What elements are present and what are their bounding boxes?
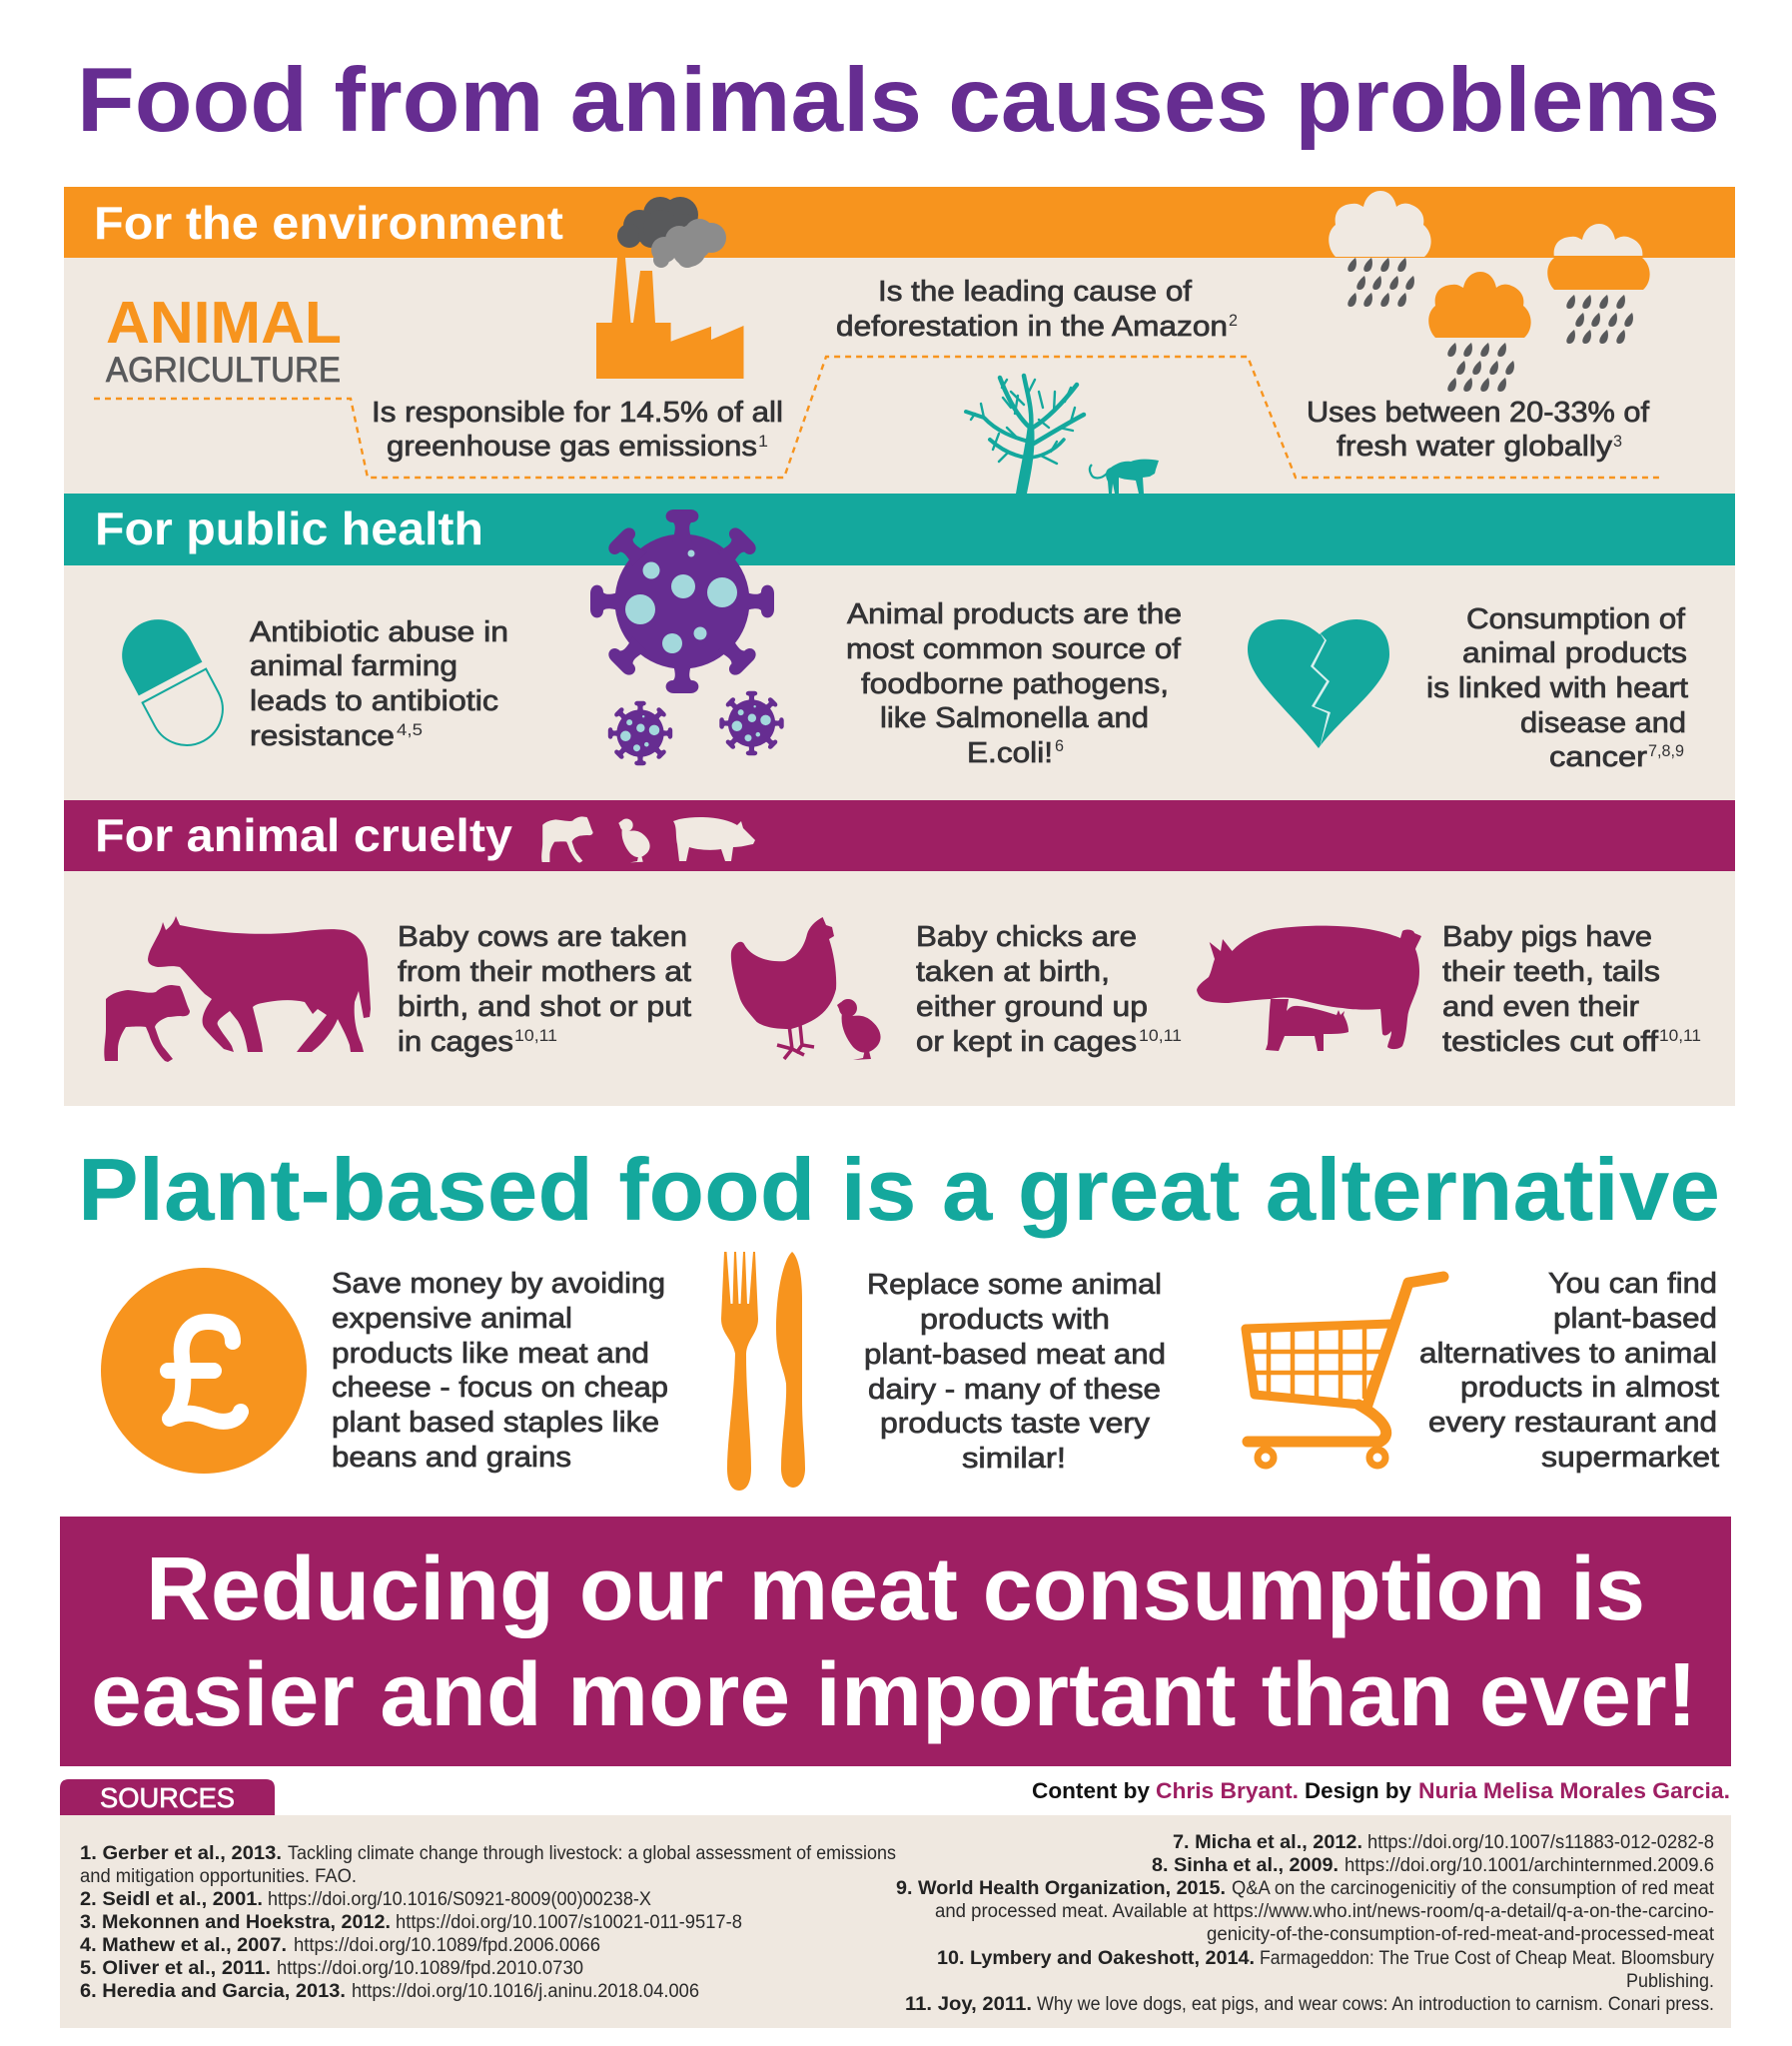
- sources list: right column: Why we love dogs, eat pigs, and wear cows: An introduction to carnism. Conari press.: [1037, 1994, 1714, 2015]
- sources list: left column: and mitigation opportunities. FAO.: [80, 1866, 357, 1887]
- text: heart disease and cancer: is linked with heart: [1426, 672, 1688, 704]
- text: heart disease and cancer: [1426, 603, 1688, 773]
- sources list: right column: [896, 1832, 1715, 2015]
- text: find alternatives: products in almost: [1460, 1372, 1719, 1404]
- text: save money: cheese - focus on cheap: [332, 1372, 668, 1404]
- text: baby chicks: 10,11: [1139, 1026, 1182, 1045]
- text: find alternatives: every restaurant and: [1428, 1407, 1717, 1439]
- text: replace animal products: dairy - many of these: [868, 1374, 1161, 1406]
- text: baby pigs: Baby pigs have: [1442, 921, 1652, 953]
- text: replace animal products: plant-based meat and: [864, 1339, 1166, 1371]
- text: baby cows: Baby cows are taken: [398, 921, 687, 953]
- text: baby chicks: either ground up: [916, 991, 1148, 1023]
- text: baby chicks: or kept in cages: [916, 1026, 1137, 1058]
- text: replace animal products: Replace some animal: [867, 1269, 1162, 1301]
- heading bar: for animal cruelty: For animal cruelty: [95, 809, 512, 861]
- icon: broken heart: [1248, 619, 1389, 748]
- text: foodborne pathogens: foodborne pathogens,: [861, 668, 1169, 700]
- icon: header pig: [673, 817, 755, 861]
- icon: large virus: [590, 510, 774, 693]
- text: deforestation: [836, 276, 1238, 343]
- callout banner: easier and more important than ever!: [91, 1645, 1697, 1745]
- text: find alternatives: supermarket: [1541, 1442, 1719, 1474]
- sources list: right column: and processed meat. Available at https://www.who.int/news-room/q-a-detail/q-a-on-the-carcino-: [935, 1901, 1714, 1922]
- text: greenhouse gas emissions: [372, 397, 783, 463]
- icon: hen and chick: [731, 917, 881, 1060]
- sources list: right column: Farmageddon: The True Cost of Cheap Meat. Bloomsbury: [1260, 1948, 1714, 1969]
- text: heart disease and cancer: disease and: [1520, 707, 1686, 739]
- text: deforestation: 2: [1229, 311, 1238, 330]
- icon: big cat: [1090, 460, 1159, 494]
- text: fresh water: fresh water globally: [1337, 431, 1613, 463]
- text: baby pigs: 10,11: [1659, 1026, 1701, 1045]
- text: save money: expensive animal: [332, 1303, 572, 1335]
- text: greenhouse gas emissions: greenhouse gas emissions: [387, 431, 757, 463]
- text: heart disease and cancer: Consumption of: [1466, 603, 1685, 635]
- text: antibiotic resistance: 4,5: [397, 720, 423, 739]
- sources list: left column: 3. Mekonnen and Hoekstra, 2012.: [80, 1912, 391, 1933]
- text: antibiotic resistance: Antibiotic abuse in: [250, 616, 508, 648]
- sources list: left column: 2. Seidl et al., 2001.: [80, 1889, 263, 1910]
- sources list: left column: 4. Mathew et al., 2007.: [80, 1935, 287, 1956]
- icon: rain clouds: [1329, 191, 1650, 392]
- text: save money: products like meat and: [332, 1338, 649, 1370]
- icon: header calf: [541, 816, 593, 863]
- credits: Design by: [1305, 1778, 1412, 1803]
- text: baby pigs: their teeth, tails: [1442, 956, 1660, 988]
- sources list: right column: https://doi.org/10.1007/s11883-012-0282-8: [1367, 1832, 1714, 1853]
- text: find alternatives: plant-based: [1553, 1303, 1717, 1335]
- text: baby chicks: [916, 921, 1182, 1058]
- text: heart disease and cancer: cancer: [1549, 741, 1648, 773]
- heading bar: for public health: [64, 494, 1735, 565]
- text: baby cows: from their mothers at: [398, 956, 691, 988]
- text: replace animal products: products with: [920, 1304, 1110, 1336]
- sources list: left column: https://doi.org/10.1089/fpd.2010.0730: [277, 1958, 583, 1979]
- text: baby pigs: [1442, 921, 1701, 1058]
- text: antibiotic resistance: animal farming: [250, 650, 457, 682]
- text: baby pigs: and even their: [1442, 991, 1640, 1023]
- dashed connector line: [94, 357, 1662, 478]
- text: baby cows: in cages: [398, 1026, 513, 1058]
- text: fresh water: Uses between 20-33% of: [1307, 397, 1649, 429]
- text: save money: Save money by avoiding: [332, 1268, 665, 1300]
- sources list: left column: [80, 1843, 896, 2002]
- text: replace animal products: [864, 1269, 1166, 1475]
- sources list: right column: 7. Micha et al., 2012.: [1173, 1832, 1362, 1853]
- text: save money: beans and grains: [332, 1442, 571, 1474]
- sources list: right column: Q&A on the carcinogenicitiy of the consumption of red meat: [1232, 1878, 1715, 1899]
- text: find alternatives: [1419, 1268, 1719, 1474]
- credits: [1032, 1778, 1730, 1803]
- text: fresh water: [1307, 397, 1649, 463]
- panel: for the environment: [64, 187, 1735, 494]
- text: greenhouse gas emissions: 1: [758, 432, 768, 451]
- text: foodborne pathogens: E.coli!: [967, 737, 1053, 769]
- text: baby cows: 10,11: [514, 1026, 557, 1045]
- icon: pig and piglet: [1197, 926, 1421, 1051]
- text: foodborne pathogens: Animal products are the: [847, 598, 1182, 630]
- sources list: left column: Tackling climate change through livestock: a global assessment of emissions: [288, 1843, 896, 1864]
- text: antibiotic resistance: resistance: [250, 720, 395, 752]
- icon: bare tree: [966, 376, 1084, 494]
- sources list: left column: 6. Heredia and Garcia, 2013.: [80, 1981, 346, 2002]
- sources list: right column: genicity-of-the-consumption-of-red-meat-and-processed-meat: [1207, 1924, 1715, 1945]
- icon: cow and calf: [104, 916, 371, 1062]
- text: foodborne pathogens: [846, 598, 1182, 769]
- panel: for animal cruelty: [64, 800, 1735, 1106]
- heading bar: for the environment: [64, 187, 1735, 258]
- text: antibiotic resistance: leads to antibiotic: [250, 685, 498, 717]
- callout banner: Reducing our meat consumption is: [146, 1539, 1645, 1639]
- icon: factory with smoke: [596, 197, 743, 379]
- credits: Content by: [1032, 1778, 1151, 1803]
- sources tab: SOURCES: [100, 1782, 235, 1813]
- sources tab: [60, 1779, 275, 1815]
- text: heart disease and cancer: 7,8,9: [1648, 741, 1684, 760]
- text: baby chicks: Baby chicks are: [916, 921, 1137, 953]
- icon: fork and knife: [721, 1252, 805, 1491]
- icon: header chick: [618, 818, 650, 862]
- heading: animal agriculture: ANIMAL: [106, 290, 342, 356]
- text: deforestation: deforestation in the Amazon: [836, 311, 1228, 343]
- text: baby cows: birth, and shot or put: [398, 991, 691, 1023]
- sources list: right column: 10. Lymbery and Oakeshott, 2014.: [937, 1948, 1255, 1969]
- sources list: right column: 9. World Health Organization, 2015.: [896, 1878, 1226, 1899]
- sources list: right column: Publishing.: [1626, 1971, 1714, 1992]
- sources list: right column: 8. Sinha et al., 2009.: [1152, 1855, 1339, 1876]
- text: baby cows: [398, 921, 691, 1058]
- icon: small virus left: [608, 701, 672, 765]
- icon: shopping cart: [1246, 1277, 1443, 1466]
- panel: for public health: [64, 494, 1735, 800]
- text: antibiotic resistance: [250, 616, 508, 752]
- icon: antibiotic capsule: [109, 606, 236, 758]
- sources list: left column: https://doi.org/10.1007/s10021-011-9517-8: [396, 1912, 742, 1933]
- heading bar: for public health: For public health: [95, 503, 483, 554]
- text: heart disease and cancer: animal products: [1462, 637, 1687, 669]
- title: Food from animals causes problems: [77, 50, 1720, 151]
- heading: animal agriculture: [106, 290, 342, 390]
- text: foodborne pathogens: 6: [1055, 736, 1064, 755]
- text: save money: [332, 1268, 668, 1474]
- icon: pound coin: [101, 1268, 307, 1474]
- text: find alternatives: You can find: [1548, 1268, 1717, 1300]
- sources list: right column: https://doi.org/10.1001/archinternmed.2009.6: [1344, 1855, 1714, 1876]
- text: replace animal products: products taste very: [880, 1408, 1151, 1440]
- text: save money: plant based staples like: [332, 1407, 659, 1439]
- callout banner: [60, 1517, 1731, 1766]
- sources list: left column: https://doi.org/10.1016/j.aninu.2018.04.006: [352, 1981, 699, 2002]
- sources list: right column: 11. Joy, 2011.: [905, 1994, 1032, 2015]
- sources list: left column: https://doi.org/10.1016/S0921-8009(00)00238-X: [268, 1889, 651, 1910]
- text: fresh water: 3: [1613, 432, 1622, 451]
- text: replace animal products: similar!: [962, 1443, 1066, 1475]
- text: foodborne pathogens: like Salmonella and: [880, 702, 1149, 734]
- text: deforestation: Is the leading cause of: [878, 276, 1192, 308]
- heading: animal agriculture: AGRICULTURE: [106, 351, 341, 390]
- heading bar: for the environment: For the environment: [94, 197, 563, 249]
- panel: sources: [60, 1779, 1731, 2028]
- icon: small virus right: [719, 691, 784, 755]
- text: baby pigs: testicles cut off: [1442, 1026, 1658, 1058]
- text: foodborne pathogens: most common source of: [846, 633, 1181, 665]
- credits: Chris Bryant.: [1156, 1778, 1299, 1803]
- sources list: left column: 1. Gerber et al., 2013.: [80, 1843, 282, 1864]
- text: find alternatives: alternatives to animal: [1419, 1338, 1717, 1370]
- heading bar: for animal cruelty: [64, 800, 1735, 871]
- heading: plant-based alternative: Plant-based food is a great alternative: [78, 1140, 1720, 1239]
- text: greenhouse gas emissions: Is responsible for 14.5% of all: [372, 397, 783, 429]
- sources list: left column: https://doi.org/10.1089/fpd.2006.0066: [294, 1935, 600, 1956]
- text: baby chicks: taken at birth,: [916, 956, 1110, 988]
- credits: Nuria Melisa Morales Garcia.: [1418, 1778, 1730, 1803]
- sources list: left column: 5. Oliver et al., 2011.: [80, 1958, 271, 1979]
